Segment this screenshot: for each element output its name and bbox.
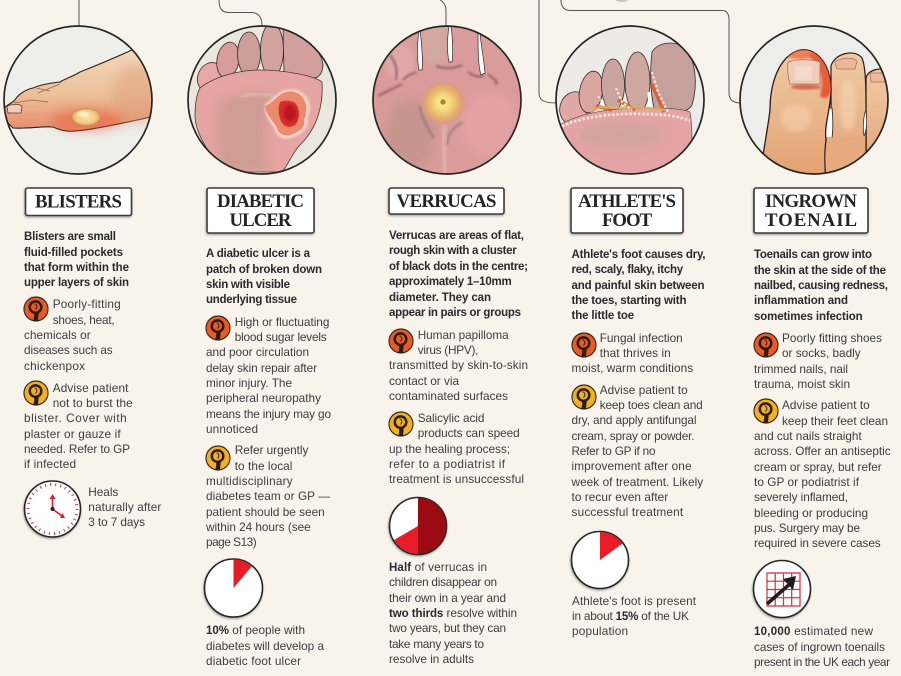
text: statistic: present in the UK each year [754, 655, 890, 669]
intro text: red, scaly, flaky, itchy [572, 264, 684, 276]
icon: rising graph [754, 560, 810, 618]
icon: advice [572, 385, 596, 409]
text: advice: patient should be seen [206, 505, 325, 519]
icon: cause [206, 316, 230, 340]
text: statistic: two thirds resolve within [389, 606, 517, 620]
text: advice: refer to a podiatrist if [389, 457, 506, 471]
icon: advice [24, 381, 48, 405]
text: cause: Poorly-fitting [53, 297, 121, 311]
text: statistic: in about 15% of the UK [572, 609, 689, 623]
panel: diabetic ulcer [188, 23, 336, 668]
text: cause: contaminated surfaces [389, 389, 508, 403]
intro text: of black dots in the centre; [389, 261, 528, 273]
text: cause: Human papilloma [418, 328, 509, 342]
text: advice: blister. Cover with [24, 411, 127, 425]
text: advice: needed. Refer to GP [24, 442, 130, 456]
text: advice: Advise patient to [600, 383, 688, 397]
intro text: Verrucas are areas of flat, [389, 230, 524, 242]
text: advice: dry, and apply antifungal [572, 413, 696, 427]
text: advice: cream or spray, but refer [754, 460, 882, 474]
text: advice: treatment is unsuccessful [389, 472, 524, 486]
intro text: Toenails can grow into [754, 249, 872, 261]
text: statistic: 10,000 estimated new [754, 624, 873, 638]
text: statistic: take many years to [389, 637, 484, 651]
intro text: nailbed, causing redness, [754, 280, 888, 292]
panel: athlete's foot [555, 26, 706, 638]
icon: advice [206, 446, 230, 470]
icon: advice [754, 399, 778, 423]
text: advice: bleeding or producing [754, 506, 868, 520]
text: healing time: naturally after [88, 500, 161, 514]
intro text: appear in pairs or groups [389, 307, 521, 319]
text: advice: page S13) [206, 535, 257, 549]
title: Athlete's foot: ATHLETE'S [578, 191, 676, 212]
intro text: the little toe [572, 310, 634, 322]
text: advice: across. Offer an antiseptic [754, 444, 891, 458]
text: advice: week of treatment. Likely [570, 475, 703, 489]
text: cause: High or fluctuating [235, 315, 329, 329]
intro text [572, 249, 706, 322]
text: cause: trimmed nails, nail [754, 362, 848, 376]
text: cause: peripheral neuropathy [206, 391, 321, 405]
text: statistic: two years, but they can [389, 621, 506, 635]
text: advice: products can speed [418, 426, 520, 440]
illustration: athlete's foot between toes [555, 26, 704, 175]
text: advice: diabetes team or GP — [206, 489, 330, 503]
text: cause: transmitted by skin-to-skin [389, 358, 528, 372]
illustration: verruca on sole [373, 14, 521, 175]
text: cause [389, 328, 528, 403]
title: Diabetic ulcer: ULCER [230, 210, 292, 231]
text: advice: if infected [24, 457, 76, 471]
text: advice: not to burst the [53, 396, 133, 410]
text: cause: contact or via [389, 374, 459, 388]
text: advice [754, 398, 891, 550]
text: advice [205, 443, 330, 549]
text: cause: or socks, badly [782, 346, 861, 360]
text: advice: and cut nails straight [754, 429, 862, 443]
intro text: inflammation and [754, 295, 848, 307]
text: healing time: 3 to 7 days [88, 515, 145, 529]
intro text: patch of broken down [206, 264, 322, 276]
text: cause: means the injury may go [206, 407, 331, 421]
text: cause [24, 297, 121, 373]
intro text: diameter. They can [389, 292, 491, 304]
text: advice [570, 383, 703, 519]
text: advice: to the local [235, 459, 292, 473]
intro text: that form within the [24, 262, 129, 274]
text: cause: virus (HPV), [418, 343, 478, 357]
text: advice: to GP or podiatrist if [754, 475, 860, 489]
icon: advice [389, 412, 413, 436]
intro text: the toes, starting with [572, 295, 686, 307]
panel: blisters [4, 26, 161, 537]
text: advice: keep toes clean and [600, 398, 703, 412]
text: advice: up the healing process; [389, 442, 510, 456]
illustration: ingrown toenail [740, 26, 892, 180]
text: statistic: cases of ingrown toenails [754, 640, 885, 654]
text: advice: plaster or gauze if [24, 427, 121, 441]
title: Athlete's foot: FOOT [602, 210, 652, 231]
text: advice: multidisciplinary [206, 474, 293, 488]
text: advice: within 24 hours (see [205, 520, 311, 534]
icon: cause [572, 333, 596, 357]
text: advice: severely inflamed, [754, 490, 848, 504]
title: Verrucas: VERRUCAS [396, 191, 496, 212]
text: advice: pus. Surgery may be [754, 521, 860, 535]
title: Blisters: BLISTERS [35, 192, 122, 212]
text: cause: minor injury. The [206, 376, 292, 390]
text: advice: Refer urgently [235, 443, 308, 457]
text: cause: trauma, moist skin [754, 377, 850, 391]
text: cause: chemicals or [24, 328, 91, 342]
title: Diabetic ulcer [207, 188, 314, 233]
intro text: A diabetic ulcer is a [206, 248, 311, 260]
title: Diabetic ulcer: DIABETIC [217, 191, 304, 212]
text: statistic: Athlete's foot is present [572, 594, 697, 608]
text: advice: improvement after one [572, 459, 692, 473]
text: advice: Advise patient to [782, 398, 870, 412]
text: advice: Salicylic acid [418, 411, 484, 425]
text: statistic: population [572, 624, 628, 638]
text: advice: Advise patient [53, 381, 129, 395]
text: cause [754, 331, 882, 391]
title: Ingrown toenail: TOENAIL [765, 210, 857, 231]
intro text [206, 248, 322, 306]
text: advice: successful treatment [572, 505, 684, 519]
text: healing time [88, 485, 161, 529]
intro text: rough skin with a cluster [389, 245, 517, 257]
text: healing time: Heals [88, 485, 118, 499]
text: cause: delay skin repair after [206, 361, 317, 375]
intro text [24, 231, 129, 289]
text: advice: cream, spray or powder. [572, 429, 694, 443]
title: Blisters [26, 188, 132, 216]
intro text: the skin at the side of the [754, 265, 886, 277]
panel: ingrown toenail [740, 26, 892, 669]
text: statistic: Half of verrucas in [389, 560, 487, 574]
intro text: and painful skin between [572, 280, 704, 292]
pie chart: 10% [204, 559, 262, 617]
text: advice: required in severe cases [754, 536, 881, 550]
text: cause: chickenpox [24, 359, 85, 373]
text: advice: keep their feet clean [782, 414, 888, 428]
illustration: foot with blister [4, 26, 157, 174]
text: cause [206, 315, 331, 436]
text: cause: moist, warm conditions [572, 361, 693, 375]
text: cause: that thrives in [600, 346, 671, 360]
text: statistic [206, 623, 324, 668]
text: statistic: their own in a year and [389, 591, 506, 605]
text: cause: unnoticed [206, 422, 258, 436]
icon: cause [754, 333, 778, 357]
text: statistic: diabetes will develop a [206, 639, 324, 653]
text: cause: and poor circulation [206, 345, 309, 359]
text: cause: Poorly fitting shoes [782, 331, 882, 345]
text: statistic: resolve in adults [389, 652, 474, 666]
title: Ingrown toenail [754, 188, 868, 233]
text: statistic: 10% of people with [206, 623, 305, 637]
icon: cause [24, 297, 48, 321]
text: cause: diseases such as [24, 343, 113, 357]
intro text: sometimes infection [754, 311, 863, 323]
text: statistic: diabetic foot ulcer [206, 654, 301, 668]
intro text [754, 249, 888, 323]
text: statistic [754, 624, 890, 669]
text: statistic: children disappear on [389, 575, 497, 589]
pie chart: half and two thirds [390, 498, 446, 554]
intro text: skin with visible [206, 279, 290, 291]
text: advice [24, 381, 133, 471]
intro text: approximately 1–10mm [389, 276, 512, 288]
text: cause: blood sugar levels [235, 330, 327, 344]
intro text: upper layers of skin [24, 277, 129, 289]
text: advice [389, 411, 524, 486]
text: cause: shoes, heat, [53, 313, 115, 327]
intro text: Athlete's foot causes dry, [572, 249, 706, 261]
icon: clock [24, 481, 80, 537]
connector lines [79, 0, 741, 103]
illustration: diabetic ulcer on sole [188, 23, 336, 174]
text: advice: to recur even after [572, 490, 668, 504]
pie chart: 15% [572, 532, 628, 588]
partial element at top edge [616, 0, 628, 2]
icon: cause [389, 329, 413, 353]
text: statistic [389, 560, 517, 666]
title: Athlete's foot [571, 188, 683, 233]
intro text: underlying tissue [206, 294, 297, 306]
intro text: fluid-filled pockets [24, 247, 123, 259]
intro text [389, 230, 528, 319]
text: cause: Fungal infection [600, 331, 683, 345]
panel: verrucas [373, 14, 528, 666]
title: Ingrown toenail: INGROWN [765, 191, 857, 212]
intro text: Blisters are small [24, 231, 116, 243]
text: cause [572, 331, 693, 375]
text: advice: Refer to GP if no [572, 444, 656, 458]
text: statistic [572, 594, 697, 638]
